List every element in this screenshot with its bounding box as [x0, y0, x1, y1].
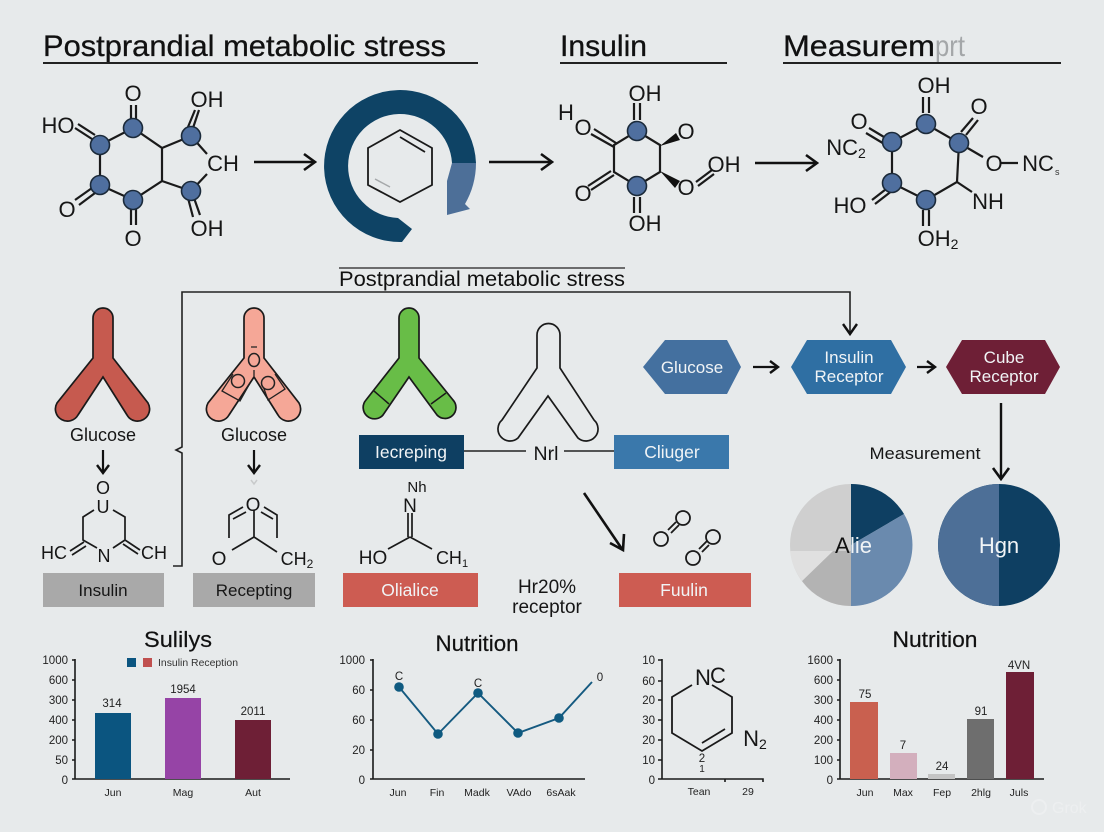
molecule: insulin: H — [558, 100, 574, 125]
bar values and months: Jun — [105, 787, 122, 799]
molecule: measurement: NC — [1022, 151, 1054, 176]
molecule: insulin: O — [677, 119, 695, 144]
y axis labels: 400 — [814, 715, 833, 727]
y axis labels: 60 — [352, 685, 365, 697]
arrow: down — [102, 450, 104, 473]
chart title: Nutrition — [436, 631, 518, 656]
bars — [95, 698, 271, 779]
label box: Recepting: Recepting — [216, 581, 292, 600]
bar values and months: 7 — [900, 740, 906, 752]
molecule: insulin: OH — [628, 81, 662, 106]
point labels and months: 0 — [597, 672, 603, 684]
y axis labels — [42, 655, 68, 787]
arrow: cube receptor to right pie — [1000, 403, 1002, 479]
y axis labels: 600 — [814, 675, 833, 687]
arrow: glucose to insulin receptor — [753, 366, 778, 368]
label box: Cliuger — [614, 435, 729, 469]
molecule: first structure: HO — [42, 113, 74, 138]
molecule: recepting — [212, 480, 314, 571]
point labels and months: 6sAak — [546, 787, 576, 799]
molecule: first structure: O — [124, 81, 142, 106]
text: Hr20% receptor — [512, 577, 583, 618]
icon: oxygen pairs — [654, 511, 720, 565]
molecule: first structure: OH — [190, 87, 224, 112]
bar values and months: Jun — [857, 787, 874, 799]
molecule: measurement: O — [850, 109, 868, 134]
molecule ring — [672, 663, 767, 775]
y axis labels: 400 — [49, 715, 68, 727]
data line — [394, 682, 592, 739]
molecule: measurement: NH — [972, 189, 1004, 214]
watermark: Grok — [1032, 800, 1088, 817]
arrow: insulin molecule to third molecule — [755, 162, 817, 164]
y axis labels: 20 — [642, 735, 655, 747]
y axis labels: 1000 — [339, 655, 365, 667]
molecule: Oliance: HO — [359, 548, 387, 569]
molecule: lower left: HC — [41, 543, 67, 563]
molecule ring: 2 — [699, 753, 705, 765]
molecule ring: N — [743, 726, 759, 751]
x axis labels: Tean — [688, 786, 711, 798]
bars — [850, 672, 1034, 779]
molecule ring: 1 — [699, 764, 705, 775]
molecule: lower left: O — [96, 478, 110, 498]
molecule: Oliance: Nh — [407, 479, 427, 496]
arrow: down — [253, 450, 255, 473]
molecule: lower left: CH — [141, 543, 167, 563]
y axis labels: 20 — [352, 745, 365, 757]
label box: Fuulin: Fuulin — [660, 580, 708, 600]
label: Measurement: Measurement — [870, 444, 981, 463]
molecule: recepting: O — [212, 549, 226, 570]
x axis labels: 29 — [742, 786, 754, 798]
pie chart: Alie — [790, 484, 912, 606]
molecule: first structure: O — [124, 226, 142, 251]
bar values and months: 75 — [859, 689, 871, 701]
y axis labels — [807, 655, 833, 787]
legend: Insulin Reception — [158, 658, 238, 669]
column: red receptor — [41, 308, 167, 607]
hexagon: Cube Receptor: Receptor — [970, 367, 1039, 386]
axes — [72, 659, 290, 779]
icon: green Y receptor — [363, 308, 456, 419]
heading: Measurement: prt — [935, 30, 966, 63]
molecule: Oliance — [359, 479, 468, 570]
molecule: Oliance: CH — [436, 548, 462, 568]
molecule: insulin — [558, 81, 740, 236]
molecule: first structure: OH — [190, 216, 224, 241]
bar values and months: Fep — [933, 787, 951, 799]
hexagon: Insulin Receptor — [791, 340, 906, 394]
point labels and months: VAdo — [507, 787, 532, 799]
line chart: Nutrition — [339, 631, 603, 799]
molecule: measurement: 2 — [951, 236, 959, 252]
bar chart: Sulilys — [42, 627, 290, 799]
heading: Postprandial metabolic stress: Postprandial metabolic stress — [43, 30, 446, 63]
bar values and months: Aut — [245, 787, 261, 799]
molecule: insulin: OH — [628, 211, 662, 236]
point labels and months — [390, 671, 603, 799]
hexagon: Insulin Receptor: Insulin — [824, 348, 874, 367]
icon: red Y receptor — [55, 308, 150, 421]
molecule: recepting: 2 — [307, 557, 314, 571]
molecule ring: C — [710, 663, 726, 688]
axes — [658, 659, 763, 782]
bar values and months: Juls — [1010, 787, 1028, 799]
pie chart: Alie: A — [835, 533, 850, 558]
molecule ring: 2 — [759, 736, 767, 752]
column: salmon receptor — [193, 308, 315, 607]
bar values and months: 2011 — [241, 706, 265, 718]
molecule: measurement: 2 — [858, 145, 866, 161]
y axis labels: 300 — [49, 695, 68, 707]
y axis labels: 60 — [352, 715, 365, 727]
label box: Fuulin — [619, 573, 751, 607]
y axis labels: 100 — [814, 755, 833, 767]
point labels and months: C — [474, 678, 482, 690]
molecule: first structure: CH — [207, 151, 239, 176]
bar values and months: 314 — [102, 698, 122, 710]
bar values and months: Mag — [173, 787, 193, 799]
y axis labels: 10 — [642, 655, 655, 667]
arrow: ring to insulin molecule — [489, 161, 552, 163]
label box: Olialice: Olialice — [381, 580, 439, 600]
ring diagram — [324, 90, 476, 242]
molecule: measurement: O — [970, 94, 988, 119]
bar values and months: 2hlg — [971, 787, 991, 799]
y axis labels: 0 — [649, 775, 655, 787]
bar values and months — [102, 684, 265, 799]
watermark: Grok: Grok — [1052, 800, 1088, 817]
label box: Insulin: Insulin — [78, 581, 128, 600]
y axis labels — [642, 655, 655, 787]
bracket connector with arrow to insulin receptor — [173, 292, 857, 566]
molecule: first structure — [42, 81, 239, 251]
label: Glucose: Glucose — [221, 425, 287, 445]
molecule: lower left: N — [98, 546, 110, 566]
text: Hr20% receptor: Hr20% — [518, 577, 576, 598]
molecule: insulin: O — [574, 115, 592, 140]
bar values and months: Max — [893, 787, 914, 799]
chart title: Sulilys — [144, 627, 212, 652]
y axis labels: 1600 — [807, 655, 833, 667]
molecule ring: N — [695, 665, 711, 690]
axes — [837, 659, 1044, 779]
y axis labels: 1000 — [42, 655, 68, 667]
hexagon: Cube Receptor: Cube — [984, 348, 1024, 367]
hexagon: Insulin Receptor: Receptor — [815, 367, 884, 386]
point labels and months: Madk — [464, 787, 491, 799]
point labels and months: C — [395, 671, 403, 683]
heading: Measurement — [783, 30, 1061, 63]
label box: Cliuger: Cliuger — [644, 442, 700, 462]
molecule: Oliance: N — [403, 496, 417, 517]
molecule: lower left: U — [96, 497, 110, 517]
y axis labels: 300 — [814, 695, 833, 707]
connector: Nrl link: Nrl — [534, 443, 558, 465]
molecule: insulin: O — [677, 175, 695, 200]
axes — [370, 659, 585, 779]
subheading: Postprandial metabolic stress: Postprandial metabolic stress — [339, 267, 625, 291]
molecule: measurement: OH — [918, 226, 951, 251]
icon: outline Y receptor — [498, 324, 598, 441]
molecule: measurement: s — [1055, 167, 1060, 177]
molecule: insulin: OH — [708, 152, 740, 177]
y axis labels: 0 — [827, 775, 833, 787]
molecule: insulin: O — [574, 181, 592, 206]
label box: Insulin — [43, 573, 164, 607]
y axis labels: 0 — [62, 775, 68, 787]
molecule: first structure: O — [58, 197, 76, 222]
column: green receptor — [343, 308, 478, 607]
heading: Insulin: Insulin — [560, 30, 647, 63]
y axis labels: 200 — [814, 735, 833, 747]
point labels and months: Fin — [430, 787, 444, 799]
label box: Iecreping: Iecreping — [375, 442, 447, 462]
bar values and months: 4VN — [1008, 660, 1030, 672]
molecule: measurement: O — [985, 151, 1003, 176]
bar values and months: 91 — [975, 706, 987, 718]
pie chart: Hgn: Hgn — [979, 533, 1019, 558]
molecule: lower left — [41, 478, 167, 566]
legend — [127, 658, 238, 669]
y axis labels — [339, 655, 365, 787]
hexagon: Glucose: Glucose — [661, 358, 723, 377]
pie chart: Hgn — [938, 484, 1060, 606]
molecule: measurement: HO — [834, 193, 866, 218]
label box: Recepting — [193, 573, 315, 607]
y axis labels: 50 — [55, 755, 68, 767]
pie chart: Alie: lie — [850, 533, 872, 558]
chart title: Nutrition — [892, 627, 978, 652]
arrow: insulin receptor to cube receptor — [917, 366, 935, 368]
bar values and months: 24 — [936, 761, 949, 773]
y axis labels: 600 — [49, 675, 68, 687]
point labels and months: Jun — [390, 787, 407, 799]
text: Hr20% receptor: receptor — [512, 597, 583, 618]
arrow: diagonal to Fuulin — [584, 493, 624, 550]
molecule: measurement — [826, 73, 1060, 252]
y axis labels: 10 — [642, 755, 655, 767]
label box: Iecreping — [359, 435, 464, 469]
y axis labels: 20 — [642, 695, 655, 707]
bar chart: Nutrition — [807, 627, 1044, 799]
heading: Measurement: Measurem — [783, 30, 935, 63]
hexagon: Cube Receptor — [946, 340, 1060, 394]
icon: salmon Y receptor — [206, 308, 301, 421]
molecule: measurement: OH — [918, 73, 950, 98]
x axis labels — [688, 786, 754, 798]
molecule: measurement: NC — [826, 135, 858, 160]
y axis labels: 0 — [359, 775, 365, 787]
molecule: recepting: O — [246, 495, 260, 516]
chart with molecule overlay — [642, 655, 767, 798]
bar values and months — [857, 660, 1030, 799]
label box: Olialice — [343, 573, 478, 607]
molecule: Oliance: 1 — [462, 558, 468, 570]
bar values and months: 1954 — [170, 684, 196, 696]
molecule: recepting: CH — [281, 549, 307, 569]
hexagon: Glucose — [643, 340, 741, 394]
y axis labels: 200 — [49, 735, 68, 747]
y axis labels: 30 — [642, 715, 655, 727]
label: Glucose: Glucose — [70, 425, 136, 445]
y axis labels: 60 — [642, 676, 655, 688]
arrow: first molecule to ring — [254, 161, 315, 163]
